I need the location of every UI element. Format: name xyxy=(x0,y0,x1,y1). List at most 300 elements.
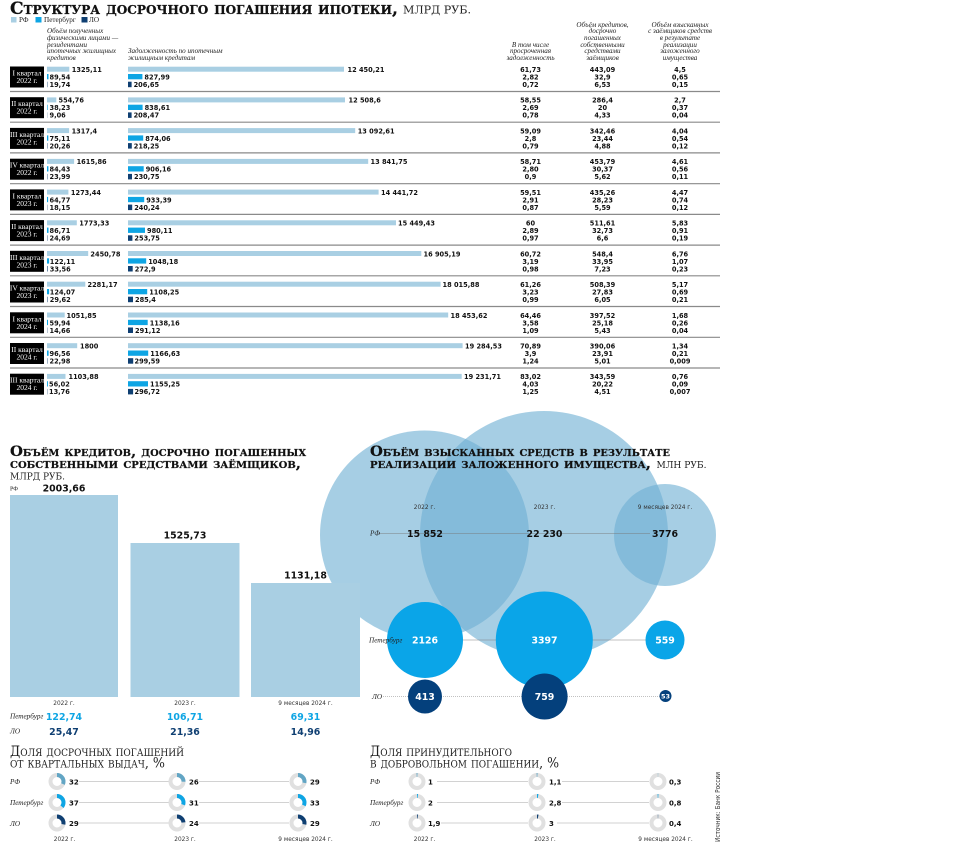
donut labels: 2 xyxy=(428,800,433,808)
column header: prepaid loans: заёмщиков xyxy=(585,54,619,62)
heading: recovered funds chart xyxy=(370,444,706,472)
table row: Q2 2022: 9,06 xyxy=(50,112,66,120)
donut labels: 26 xyxy=(189,778,199,786)
table row: Q1 2022: 206,65 xyxy=(134,81,159,89)
table row: Q3 2023 xyxy=(10,250,720,276)
bubble chart labels: 759 xyxy=(535,692,554,703)
table row: Q4 2023: 5,17 xyxy=(672,281,689,289)
heading: recovered funds chart: Объём взысканных средств в результате xyxy=(370,444,670,460)
table row: Q4 2023: 124,07 xyxy=(50,288,76,296)
bar chart: prepaid loans: 1525,73 xyxy=(164,530,206,542)
donut arcs: RF xyxy=(410,775,664,788)
table row: Q1 2024: 1,68 xyxy=(672,312,689,320)
bubble chart labels: 559 xyxy=(655,636,675,646)
guide lines xyxy=(79,782,289,823)
table row: Q3 2023: 3,19 xyxy=(522,258,539,266)
table row: Q4 2023: 0,99 xyxy=(522,296,539,304)
table row: Q4 2023: 6,05 xyxy=(594,296,611,304)
table row: Q3 2022: 75,11 xyxy=(50,135,71,143)
table row: Q1 2024: 25,18 xyxy=(592,319,613,327)
table row: Q3 2022: 0,12 xyxy=(672,142,689,150)
column header: recovered funds: заложенного xyxy=(659,47,700,55)
table row: Q1 2022: 827,99 xyxy=(144,74,170,82)
column header: debt: жилищным кредитам xyxy=(128,54,195,62)
table row: Q1 2022: 2022 г. xyxy=(17,76,38,85)
table row: Q1 2022: 0,65 xyxy=(672,74,689,82)
bar chart values: Saint Petersburg xyxy=(9,712,320,723)
table row: Q3 2024: 343,59 xyxy=(590,373,616,381)
bubble chart labels: ЛО xyxy=(371,693,383,701)
table row: Q4 2022: 23,99 xyxy=(50,173,71,181)
table row: Q4 2022: 5,62 xyxy=(594,173,611,181)
table row: Q2 2023: 2023 г. xyxy=(17,230,38,239)
table row: Q1 2023: 14 441,72 xyxy=(381,189,418,197)
table row: Q1 2022: 1325,11 xyxy=(72,66,102,74)
column header: received loans: кредитов xyxy=(47,54,76,62)
table row: Q2 2024: 2024 г. xyxy=(17,352,38,362)
column header: prepaid loans xyxy=(576,21,629,62)
table row: Q3 2022: 0,54 xyxy=(672,135,689,143)
table row: Q1 2023: 28,23 xyxy=(592,196,613,204)
column header: received loans: резидентами xyxy=(46,41,88,49)
table row: Q3 2022: 23,44 xyxy=(592,135,613,143)
table row: Q3 2022: 218,25 xyxy=(134,142,160,150)
bar chart: prepaid loans: 2003,66 xyxy=(43,484,86,494)
table row: Q3 2022: 342,46 xyxy=(590,127,616,135)
table row: Q3 2024: 296,72 xyxy=(134,388,160,396)
table row: Q2 2024: 1,24 xyxy=(522,358,539,366)
table row: Q1 2024: 1138,16 xyxy=(150,319,180,327)
table row: Q2 2022: 208,47 xyxy=(134,112,159,120)
table row: Q2 2023: 60 xyxy=(526,220,535,228)
column header: recovered funds xyxy=(648,21,712,62)
table row: Q3 2023: 33,56 xyxy=(50,265,71,273)
column header: prepaid loans: собственными xyxy=(580,41,625,49)
column header: prepaid loans: Объём кредитов, xyxy=(576,21,629,29)
table row: Q2 2023: 253,75 xyxy=(134,235,160,243)
heading: forced share: в добровольном погашении, % xyxy=(370,756,559,772)
table row: Q3 2023: 60,72 xyxy=(520,250,541,258)
table row: Q1 2023: 0,12 xyxy=(672,204,689,212)
donut labels: 9 месяцев 2024 г. xyxy=(278,837,333,843)
table row: Q1 2024: 2024 г. xyxy=(17,322,38,331)
table row: Q1 2024: 0,26 xyxy=(672,319,689,327)
legend: РФ xyxy=(19,16,29,24)
donut rings xyxy=(410,775,664,830)
table row: Q1 2024 xyxy=(10,312,720,337)
table row: Q3 2024: 56,02 xyxy=(49,381,70,389)
bubble chart labels: 22 230 xyxy=(527,529,563,540)
table row: Q3 2024: 2024 г. xyxy=(17,383,38,392)
table row: Q1 2023: 435,26 xyxy=(590,189,616,197)
table row: Q3 2023: 1048,18 xyxy=(148,258,179,266)
table row: Q1 2022: I квартал xyxy=(13,68,42,78)
heading: forced share: Доля принудительного xyxy=(370,744,512,760)
table row: Q3 2023: 6,76 xyxy=(672,250,689,258)
table row: Q4 2022: 1615,86 xyxy=(77,158,107,166)
donut labels: 31 xyxy=(189,800,199,808)
table row: Q2 2022: 20 xyxy=(598,104,607,112)
table row: Q3 2024 xyxy=(10,373,691,396)
table row: Q4 2023: 27,83 xyxy=(592,288,613,296)
table row: Q3 2022: 2,8 xyxy=(525,135,537,143)
table row: Q1 2022: 4,5 xyxy=(674,66,686,74)
table row: Q1 2024: 291,12 xyxy=(135,327,161,335)
donut labels: 3 xyxy=(549,820,554,828)
bar chart: prepaid loans: 9 месяцев 2024 г. xyxy=(278,701,333,707)
bubble chart labels: 2023 г. xyxy=(534,505,555,511)
column header: received loans: Объём полученных xyxy=(47,27,104,35)
table row: Q2 2022 xyxy=(10,97,720,122)
table row: Q2 2022: 2022 г. xyxy=(17,107,38,116)
bar chart values: Saint Petersburg: Петербург xyxy=(9,712,43,720)
table row: Q2 2023: 1773,33 xyxy=(79,220,110,228)
table row: Q1 2022: 0,15 xyxy=(672,81,689,89)
column header: received loans: ипотечных жилищных xyxy=(47,47,117,55)
table row: Q1 2022: 0,72 xyxy=(522,81,539,89)
column header: debt xyxy=(128,47,223,62)
table row: Q2 2024 xyxy=(10,342,720,368)
table row: Q3 2023: 0,23 xyxy=(672,265,689,273)
table row: Q1 2023: 240,24 xyxy=(134,204,160,212)
table row: Q3 2023: 33,95 xyxy=(592,258,613,266)
table row: Q2 2024: II квартал xyxy=(11,345,43,354)
table row: Q4 2023: 61,26 xyxy=(520,281,541,289)
donut labels: 24 xyxy=(189,820,199,828)
donut labels: 2023 г. xyxy=(174,837,196,843)
heading: prepaid loans chart: собственными средствами заёмщиков, xyxy=(10,456,301,472)
bubble chart labels: 413 xyxy=(415,692,435,703)
table row: Q3 2024: 83,02 xyxy=(520,373,541,381)
table row: Q3 2022: 59,09 xyxy=(520,127,541,135)
heading: share of prepayments xyxy=(10,744,184,772)
table row: Q1 2024: 1051,85 xyxy=(66,312,97,320)
bubble chart: recovered funds xyxy=(320,411,716,720)
table row: Q2 2022: 2,7 xyxy=(674,97,686,105)
table row: Q4 2022: 906,16 xyxy=(146,166,172,174)
bar chart: prepaid loans: 1131,18 xyxy=(284,570,327,582)
bubbles: RF xyxy=(320,411,716,659)
table row: Q4 2022: 4,61 xyxy=(672,158,689,166)
table row: Q2 2023: 86,71 xyxy=(50,227,71,235)
table row: Q4 2023: 1108,25 xyxy=(149,288,180,296)
donut labels: 0,3 xyxy=(669,778,682,786)
column header: overdue xyxy=(505,41,555,62)
heading: recovered funds chart: МЛН РУБ. xyxy=(656,460,706,471)
bar chart values: Leningrad region: ЛО xyxy=(9,728,21,736)
table row: Q3 2022: 1317,4 xyxy=(72,127,97,135)
heading: prepaid loans chart xyxy=(10,444,306,482)
table row: Q1 2022 xyxy=(10,66,720,92)
bubble chart labels: 3397 xyxy=(531,636,558,646)
connector lines xyxy=(378,534,660,696)
bubble chart labels: 3776 xyxy=(652,529,679,540)
bubble chart labels: 53 xyxy=(661,692,670,700)
bar chart: prepaid loans xyxy=(10,484,360,707)
table row: Q1 2023: 4,47 xyxy=(672,189,689,197)
bubble chart labels: Петербург xyxy=(368,636,402,644)
donut labels: 32 xyxy=(69,778,79,786)
table row: Q1 2023: 64,77 xyxy=(50,196,71,204)
table row: Q4 2023: 2281,17 xyxy=(88,281,118,289)
table row: Q3 2024: 0,09 xyxy=(672,381,689,389)
table row: Q2 2024: 0,009 xyxy=(670,358,691,366)
legend xyxy=(11,16,99,24)
table row: Q2 2023: 5,83 xyxy=(672,220,689,228)
bar chart values: Saint Petersburg: 122,74 xyxy=(46,712,83,723)
donut labels: РФ xyxy=(9,778,20,786)
table row: Q2 2023: 0,91 xyxy=(672,227,689,235)
table row: Q2 2024: 19 284,53 xyxy=(465,342,502,350)
table row: Q1 2024: 5,43 xyxy=(594,327,611,335)
table row: Q1 2022: 89,54 xyxy=(50,74,71,82)
table row: Q1 2024: 1,09 xyxy=(522,327,539,335)
column header: debt: Задолженность по ипотечным xyxy=(128,47,223,55)
column header: overdue: просроченная xyxy=(510,47,551,55)
title: МЛРД РУБ. xyxy=(403,2,471,16)
donut labels xyxy=(9,778,333,843)
table row: Q1 2022: 443,09 xyxy=(590,66,616,74)
donut labels: 33 xyxy=(310,800,320,808)
column header: recovered funds: с заёмщиков средств xyxy=(648,27,712,35)
table row: Q3 2023: 16 905,19 xyxy=(424,250,461,258)
heading: prepaid loans chart: Объём кредитов, досрочно погашенных xyxy=(10,444,306,460)
table row: Q2 2024: 22,98 xyxy=(50,358,71,366)
bubble chart labels: РФ xyxy=(369,530,380,538)
table row: Q2 2022: 12 508,6 xyxy=(348,97,381,105)
legend: Петербург xyxy=(44,16,76,24)
table row: Q2 2024: 299,59 xyxy=(134,358,160,366)
table row: Q2 2023: 24,69 xyxy=(50,235,71,243)
donut labels: 29 xyxy=(69,820,79,828)
donut labels: 29 xyxy=(310,820,320,828)
donut labels: 0,4 xyxy=(669,820,682,828)
table row: Q1 2022: 12 450,21 xyxy=(348,66,385,74)
bar chart values: Leningrad region xyxy=(9,727,321,738)
table row: Q2 2022: 58,55 xyxy=(520,97,541,105)
legend: ЛО xyxy=(89,16,99,24)
table row: Q3 2022: III квартал xyxy=(10,130,44,139)
table row: Q4 2023: 3,23 xyxy=(522,288,539,296)
donut labels: 2022 г. xyxy=(414,837,435,843)
donut arcs: Saint Petersburg xyxy=(410,796,664,809)
table row: Q1 2023: 933,39 xyxy=(146,196,172,204)
table row: Q4 2023: 0,69 xyxy=(672,288,689,296)
table row: Q4 2022 xyxy=(10,158,720,184)
heading: share of prepayments: Доля досрочных погашений xyxy=(10,744,184,760)
table row: Q4 2023: 0,21 xyxy=(672,296,689,304)
donut labels: 37 xyxy=(69,800,79,808)
table row: Q3 2023: 2023 г. xyxy=(17,260,38,269)
table row: Q1 2023: 2,91 xyxy=(522,196,539,204)
table row: Q2 2023: 980,11 xyxy=(147,227,173,235)
table row: Q2 2022: 38,23 xyxy=(50,104,71,112)
donut labels: 1,9 xyxy=(428,820,441,828)
table row: Q3 2024: 20,22 xyxy=(592,381,613,389)
table row: Q2 2024: 96,56 xyxy=(50,350,71,358)
table row: Q2 2022: 0,04 xyxy=(672,112,689,120)
donut labels: ЛО xyxy=(9,820,21,828)
column header: prepaid loans: досрочно xyxy=(589,27,617,35)
bar chart values: Leningrad region: 21,36 xyxy=(170,727,200,738)
table row: Q4 2022: 0,9 xyxy=(525,173,537,181)
table row: Q4 2022: 230,75 xyxy=(134,173,160,181)
heading: forced share xyxy=(370,744,559,772)
table row: Q1 2024: 59,94 xyxy=(50,319,71,327)
table row: Q2 2022: 838,61 xyxy=(145,104,170,112)
table row: Q2 2022: 0,78 xyxy=(522,112,539,120)
table row: Q3 2023: 7,23 xyxy=(594,265,611,273)
table row: Q1 2023: 59,51 xyxy=(520,189,541,197)
table row: Q3 2022: 4,04 xyxy=(672,127,689,135)
table row: Q3 2022: 874,06 xyxy=(145,135,171,143)
bubble chart labels xyxy=(368,505,692,703)
source note: Источник: Банк России xyxy=(714,772,722,842)
table row: Q3 2022: 2022 г. xyxy=(17,137,38,146)
bar chart: prepaid loans: 2023 г. xyxy=(174,701,196,707)
table row: Q1 2024: 64,46 xyxy=(520,312,541,320)
table row: Q3 2022 xyxy=(10,127,720,153)
column header: overdue: В том числе xyxy=(512,41,549,49)
donut chart grid: share of prepayments xyxy=(9,775,333,843)
table row: Q3 2022: 20,26 xyxy=(50,142,71,150)
table row: Q2 2022: 2,69 xyxy=(522,104,539,112)
table row: Q1 2022: 32,9 xyxy=(594,74,611,82)
bubble chart labels: 2126 xyxy=(412,636,439,646)
table row: Q2 2022: 554,76 xyxy=(58,97,84,105)
donut labels: 2023 г. xyxy=(534,837,556,843)
table row: Q4 2023: 508,39 xyxy=(590,281,616,289)
bar chart values: Leningrad region: 25,47 xyxy=(49,727,79,738)
table row: Q1 2023: 1273,44 xyxy=(71,189,101,197)
table row: Q2 2024: 5,01 xyxy=(594,358,611,366)
donut labels: Петербург xyxy=(369,799,403,807)
table row: Q3 2023: 1,07 xyxy=(672,258,689,266)
guide lines xyxy=(437,782,649,823)
column header: overdue: задолженность xyxy=(505,54,555,62)
table row: Q4 2022: IV квартал xyxy=(10,161,44,170)
table row: Q4 2022: 453,79 xyxy=(590,158,616,166)
table row: Q1 2022: 6,53 xyxy=(594,81,611,89)
table row: Q1 2022: 61,73 xyxy=(520,66,541,74)
donut labels: 0,8 xyxy=(669,800,682,808)
table row: Q3 2022: 13 092,61 xyxy=(358,127,395,135)
bar chart: prepaid loans: 2022 г. xyxy=(53,701,75,707)
table row: Q1 2023: 2023 г. xyxy=(17,199,38,208)
bar chart values: Leningrad region: 14,96 xyxy=(291,727,321,738)
table row: Q2 2024: 70,89 xyxy=(520,342,541,350)
table row: Q4 2022: 13 841,75 xyxy=(370,158,408,166)
donut arcs: Leningrad region xyxy=(410,816,664,830)
table row: Q2 2024: 1800 xyxy=(80,342,99,350)
donut arcs: Leningrad region xyxy=(50,816,304,830)
table row: Q2 2024: 390,06 xyxy=(590,342,616,350)
donut rings xyxy=(50,775,304,830)
table row: Q4 2023: 29,62 xyxy=(50,296,71,304)
donut labels: Петербург xyxy=(9,799,43,807)
table row: Q4 2022: 2,80 xyxy=(522,166,539,174)
table row: Q2 2023 xyxy=(10,220,720,245)
table row: Q2 2023: 0,97 xyxy=(522,235,539,243)
table row: Q2 2023: 15 449,43 xyxy=(398,220,435,228)
table row: Q4 2022: 0,11 xyxy=(672,173,689,181)
column header: received loans xyxy=(46,27,119,62)
table row: Q4 2022: 2022 г. xyxy=(17,168,38,177)
bar chart values: Saint Petersburg: 106,71 xyxy=(167,712,203,723)
table row: Q2 2023: 32,73 xyxy=(592,227,613,235)
table row: Q4 2022: 84,43 xyxy=(50,166,71,174)
table row: Q2 2022: II квартал xyxy=(11,99,43,108)
heading: share of prepayments: от квартальных выдач, % xyxy=(10,756,165,772)
bubbles: Leningrad region xyxy=(408,674,672,720)
table row: Q4 2022: 0,56 xyxy=(672,166,689,174)
column header: prepaid loans: средствами xyxy=(584,47,621,55)
table row: Q1 2023: 18,15 xyxy=(50,204,71,212)
table row: Q4 2023: 2023 г. xyxy=(17,291,38,300)
heading: recovered funds chart: реализации заложенного имущества, xyxy=(370,456,651,472)
table row: Q3 2024: 4,03 xyxy=(522,381,539,389)
table row: Q3 2024: 1103,88 xyxy=(68,373,99,381)
table row: Q1 2024: 0,04 xyxy=(672,327,689,335)
donut labels: ЛО xyxy=(369,820,381,828)
table row: Q2 2024: 1166,63 xyxy=(150,350,181,358)
donut labels: 1 xyxy=(428,778,433,786)
table row: Q3 2024: 1,25 xyxy=(522,388,539,396)
table row: Q1 2022: 2,82 xyxy=(522,74,539,82)
table row: Q1 2023 xyxy=(10,189,720,214)
table row: Q1 2022: 19,74 xyxy=(50,81,71,89)
donut labels: РФ xyxy=(369,778,380,786)
table row: Q2 2022: 0,37 xyxy=(672,104,689,112)
table row: Q4 2022: 58,71 xyxy=(520,158,541,166)
donut labels: 29 xyxy=(310,778,320,786)
bubble chart labels: 9 месяцев 2024 г. xyxy=(638,505,692,511)
donut labels: 1,1 xyxy=(549,778,562,786)
donut arcs: RF xyxy=(50,775,304,788)
table row: Q2 2023: 2,89 xyxy=(522,227,539,235)
table row: Q1 2023: 0,74 xyxy=(672,196,689,204)
table row: Q1 2023: 0,87 xyxy=(522,204,539,212)
table row: Q2 2024: 23,91 xyxy=(592,350,613,358)
table row: Q2 2023: II квартал xyxy=(11,222,43,231)
column header: received loans: физическими лицами — xyxy=(47,34,119,42)
bubble chart labels: 15 852 xyxy=(407,529,443,540)
table row: Q3 2024: 4,51 xyxy=(594,388,611,396)
donut arcs: Saint Petersburg xyxy=(50,796,304,809)
column header: recovered funds: в результате xyxy=(660,34,700,42)
donut labels: 2,8 xyxy=(549,800,562,808)
table row: Q3 2023: 122,11 xyxy=(50,258,76,266)
table row: Q1 2024: 18 453,62 xyxy=(450,312,488,320)
table row: Q1 2024: 14,66 xyxy=(50,327,71,335)
table row: Q3 2023: III квартал xyxy=(10,253,44,262)
donut labels: 9 месяцев 2024 г. xyxy=(638,837,693,843)
table row: Q4 2023: 285,4 xyxy=(135,296,156,304)
bar chart: prepaid loans: РФ xyxy=(10,486,18,492)
table row: Q3 2024: 0,76 xyxy=(672,373,689,381)
table row: Q2 2022: 286,4 xyxy=(592,97,613,105)
table row: Q3 2023: 2450,78 xyxy=(90,250,121,258)
column header: recovered funds: имущества xyxy=(663,54,698,62)
table row: Q4 2023 xyxy=(10,281,720,306)
table row: Q4 2023: 18 015,88 xyxy=(442,281,480,289)
column header: prepaid loans: погашенных xyxy=(584,34,622,42)
heading: prepaid loans chart: МЛРД РУБ. xyxy=(10,472,65,482)
table row: Q3 2024: 13,76 xyxy=(49,388,70,396)
table row: Q4 2023: IV квартал xyxy=(10,284,44,292)
table row: Q2 2022: 4,33 xyxy=(594,112,611,120)
table row: Q3 2022: 0,79 xyxy=(522,142,539,150)
